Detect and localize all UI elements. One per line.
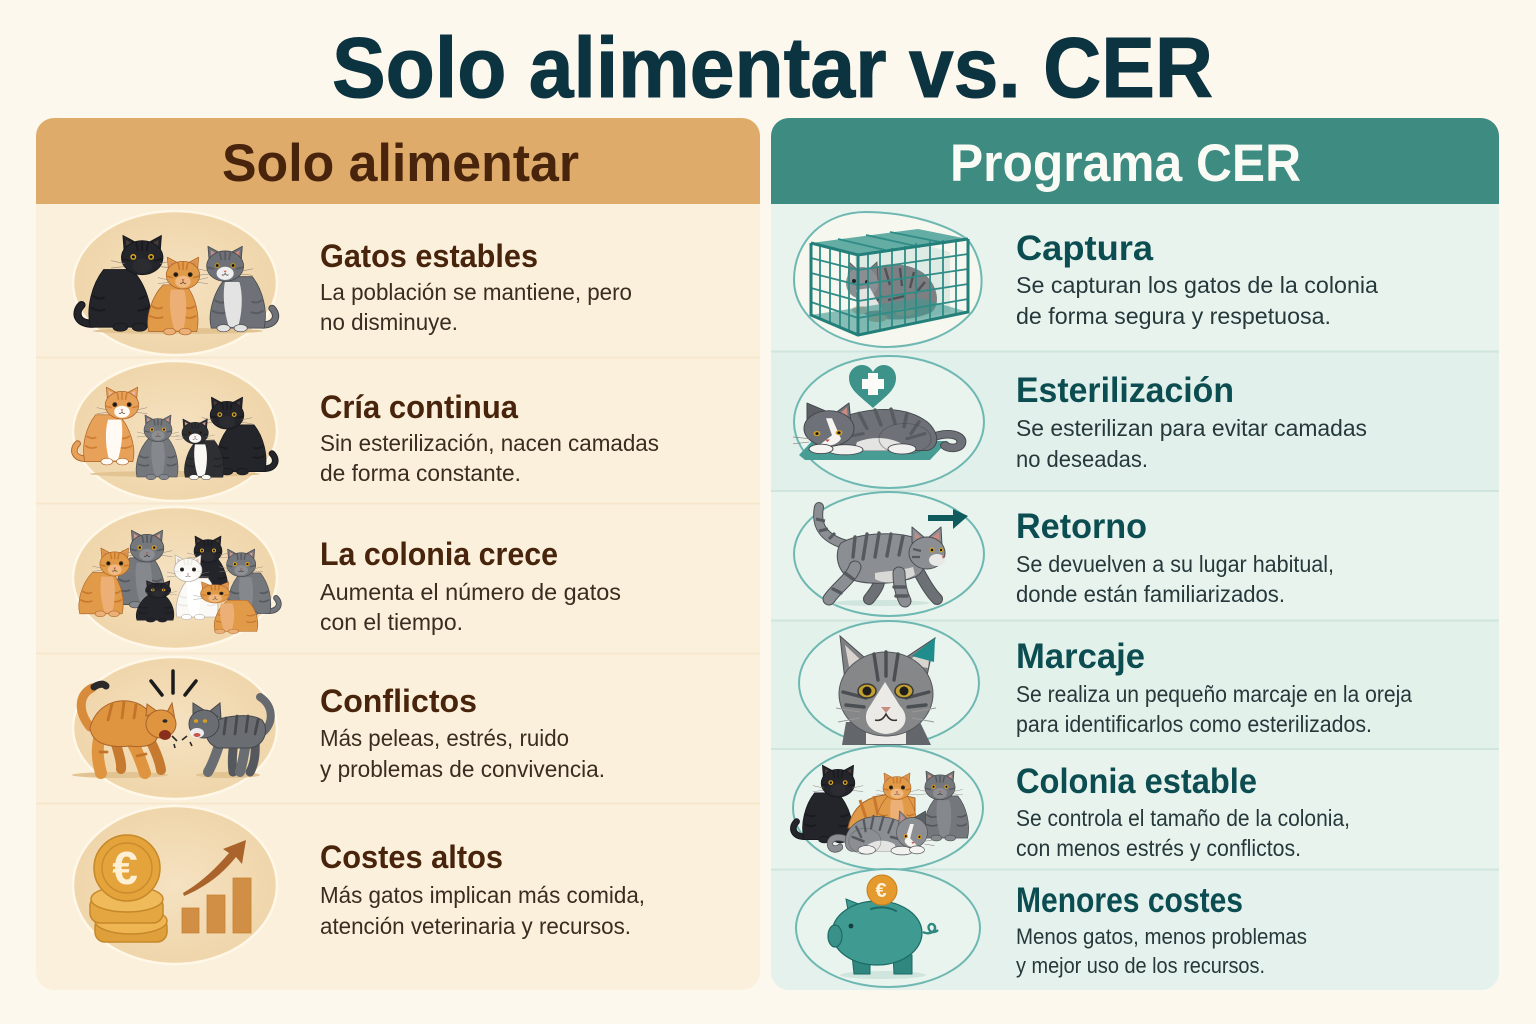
text: Esterilización: [1016, 371, 1367, 472]
text: Retorno: Retorno: [1016, 507, 1147, 546]
text: Gatos estables: no disminuye.: [320, 309, 458, 335]
text: Captura: [1016, 229, 1378, 329]
text: Cría continua: Sin esterilización, nacen camadas: [320, 430, 659, 456]
row: Costes altos: [73, 806, 645, 964]
icon: cats fighting: [72, 657, 277, 799]
row: La colonia crece: [73, 507, 621, 649]
text: La colonia crece: Aumenta el número de gatos: [320, 579, 621, 605]
icon: euro sign: €: [112, 842, 138, 894]
title: Solo alimentar vs. CER: [332, 21, 1213, 116]
text: Costes altos: atención veterinaria y recursos.: [320, 913, 631, 939]
icon: walking cat with arrow: [794, 492, 984, 616]
text: Gatos estables: [320, 238, 632, 335]
text: Colonia estable: [1016, 762, 1350, 861]
text: Captura: de forma segura y respetuosa.: [1016, 303, 1331, 329]
text: Captura: Se capturan los gatos de la colonia: [1016, 272, 1378, 298]
icon: piggy bank with coin: [796, 869, 980, 987]
text: Costes altos: Costes altos: [320, 839, 503, 875]
text: Marcaje: Se realiza un pequeño marcaje en la oreja: [1016, 681, 1412, 707]
text: Menores costes: Menores costes: [1016, 881, 1243, 920]
text: Cría continua: Cría continua: [320, 389, 518, 425]
row: Colonia estable: [793, 746, 1350, 870]
grey cat: [189, 697, 271, 772]
text: Colonia estable: Se controla el tamaño de la colonia,: [1016, 805, 1350, 831]
text: Retorno: [1016, 507, 1334, 607]
panel: Programa CER: [771, 118, 1499, 990]
text: Esterilización: Se esterilizan para evitar camadas: [1016, 415, 1367, 441]
text: Menores costes: [1016, 881, 1307, 978]
text: Conflictos: y problemas de convivencia.: [320, 756, 605, 782]
icon: calm cat group: [793, 746, 983, 870]
text: Esterilización: no deseadas.: [1016, 446, 1148, 472]
text: Gatos estables: Gatos estables: [320, 238, 538, 274]
icon: arrow: [928, 509, 968, 529]
row: Marcaje: [799, 621, 1412, 745]
heading: Solo alimentar: Solo alimentar: [222, 134, 579, 193]
text: Costes altos: Más gatos implican más comida,: [320, 882, 645, 908]
icon: cat in cage: [794, 212, 982, 347]
text: Marcaje: Marcaje: [1016, 637, 1145, 676]
text: La colonia crece: con el tiempo.: [320, 609, 463, 635]
icon: cat on mat with medical heart: [793, 356, 984, 488]
icon: cat face with ear tip: [799, 621, 979, 745]
text: Marcaje: [1016, 637, 1412, 737]
panel: Solo alimentar: [36, 118, 760, 990]
icon: many cats: [73, 507, 279, 649]
icon: coins and rising chart: [73, 806, 277, 964]
text: Conflictos: [320, 683, 605, 782]
orange cat lying behind: [848, 773, 925, 838]
text: Conflictos: Más peleas, estrés, ruido: [320, 725, 569, 751]
text: Retorno: Se devuelven a su lugar habitual,: [1016, 551, 1334, 577]
text: Menores costes: Menos gatos, menos problemas: [1016, 924, 1307, 949]
text: Retorno: donde están familiarizados.: [1016, 581, 1285, 607]
text: Colonia estable: con menos estrés y conflictos.: [1016, 835, 1301, 861]
text: Menores costes: y mejor uso de los recursos.: [1016, 953, 1265, 978]
text: Esterilización: Esterilización: [1016, 371, 1234, 410]
icon: cats and kittens: [73, 361, 277, 501]
text: Cría continua: de forma constante.: [320, 460, 521, 486]
orange cat: [81, 684, 176, 773]
text: La colonia crece: [320, 536, 621, 635]
row: Gatos estables: [73, 211, 632, 355]
row: Cría continua: [73, 361, 659, 501]
text: Colonia estable: Colonia estable: [1016, 762, 1257, 801]
text: Marcaje: para identificarlos como esterilizados.: [1016, 711, 1372, 737]
row: Captura: [794, 212, 1378, 347]
row: Menores costes: [796, 869, 1307, 987]
row: Esterilización: [793, 356, 1367, 488]
text: Costes altos: [320, 839, 645, 939]
row: Conflictos: [72, 657, 605, 799]
heading: Programa CER: Programa CER: [950, 134, 1301, 193]
text: Captura: Captura: [1016, 229, 1154, 268]
row: Retorno: [794, 492, 1334, 616]
icon: medical heart: [849, 365, 896, 408]
icon: three cats: [73, 211, 277, 355]
icon: euro coin sign: €: [875, 880, 887, 902]
text: Conflictos: Conflictos: [320, 683, 477, 719]
text: La colonia crece: La colonia crece: [320, 536, 558, 572]
text: Cría continua: [320, 389, 659, 486]
text: Gatos estables: La población se mantiene, pero: [320, 279, 632, 305]
